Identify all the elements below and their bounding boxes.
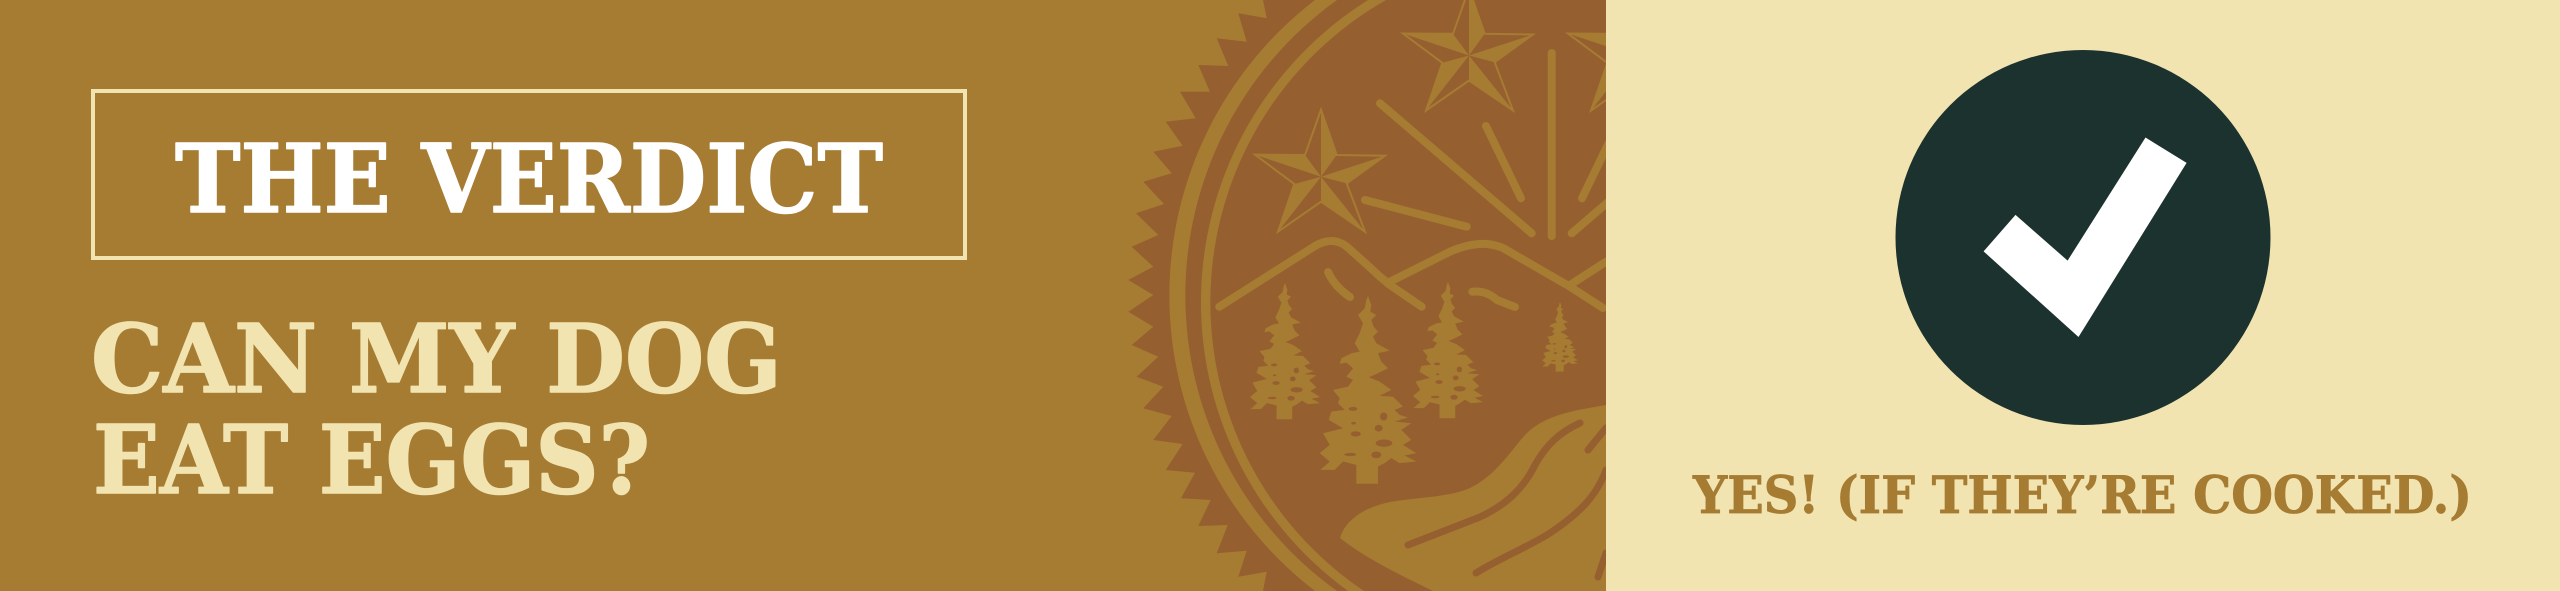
star top centre: [1403, 0, 1533, 110]
heading frame: [93, 91, 965, 258]
river: [1340, 405, 1606, 591]
panel: answer: [1606, 0, 2560, 591]
river currents: [1408, 423, 1606, 577]
pine tree 2: [1320, 296, 1416, 484]
star right: [1565, 32, 1606, 113]
badge circle: [1896, 50, 2270, 425]
panel: gold background: [0, 0, 1606, 591]
mountains: [1219, 241, 1606, 308]
pine tree 4: [1542, 302, 1578, 372]
check mark: [1984, 138, 2187, 337]
pine tree 1: [1250, 283, 1320, 419]
seal: outer ring: [1169, 0, 1337, 591]
seal: inner ring: [1201, 0, 1386, 591]
seal: serrated badge edge: [1128, 0, 1606, 591]
icon: check mark badge: [1896, 50, 2270, 425]
answer text: YES! (IF THEY’RE COOKED.): [1692, 466, 2472, 526]
question line 2: EAT EGGS?: [93, 405, 650, 516]
question line 1: CAN MY DOG: [91, 304, 782, 415]
pine tree 3: [1413, 282, 1483, 418]
star left: [1255, 110, 1385, 232]
heading box: the verdict: [93, 91, 965, 258]
seal illustration: [1128, 0, 1606, 591]
sun rays: [1361, 49, 1606, 240]
question text: [91, 304, 782, 516]
heading text: THE VERDICT: [175, 124, 883, 235]
